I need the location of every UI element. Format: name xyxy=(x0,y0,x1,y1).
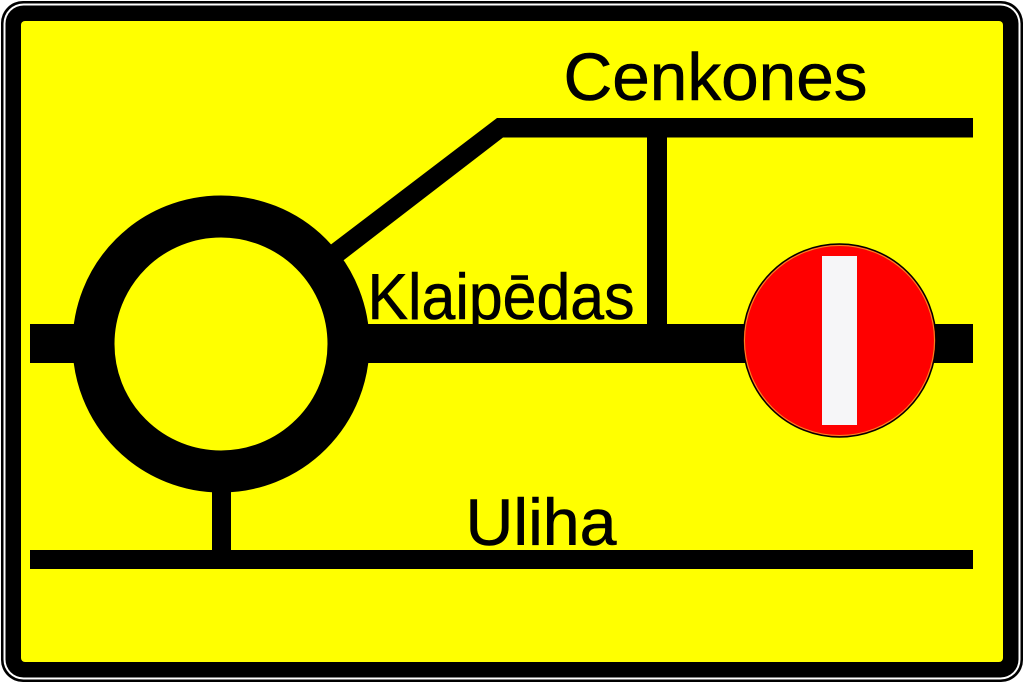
label: Uliha: Uliha xyxy=(466,485,617,559)
no entry sign xyxy=(743,244,936,437)
road: Cenkones upper road xyxy=(325,118,973,332)
label: Cenkones: Cenkones xyxy=(564,40,868,115)
road: Uliha lower road xyxy=(30,480,973,569)
roundabout xyxy=(94,216,348,472)
road: Klaipedas main road xyxy=(30,324,973,363)
label: Klaipedas: Klaipēdas xyxy=(368,260,634,333)
